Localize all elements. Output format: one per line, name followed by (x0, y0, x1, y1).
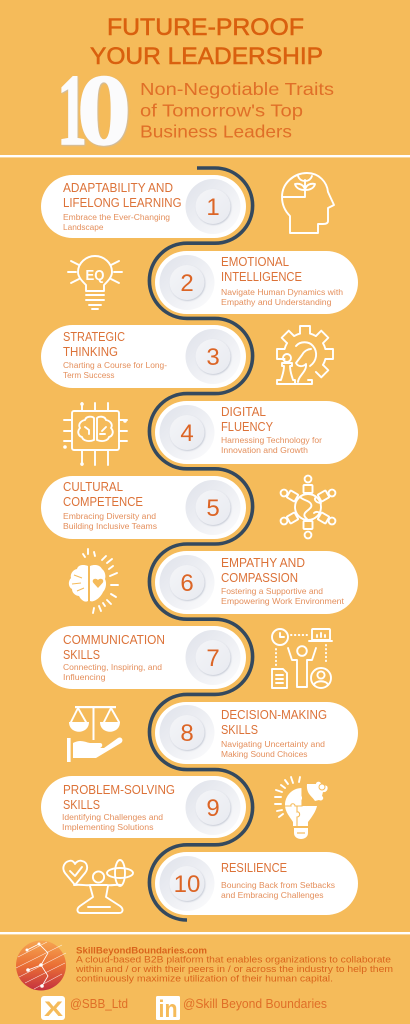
trait 4: 4 (180, 420, 194, 447)
trait 2: 2 (180, 270, 194, 297)
icon: LinkedIn: in (158, 996, 178, 1023)
subtitle (140, 79, 334, 142)
trait 9: 9 (206, 795, 220, 822)
footer description: continuously maximize utilization of their human capital. (76, 973, 333, 984)
trait 2: Navigate Human Dynamics with (221, 287, 343, 297)
trait 8: 8 (180, 720, 194, 747)
trait 8: Navigating Uncertainty and (221, 739, 325, 749)
trait 2: INTELLIGENCE (221, 270, 302, 284)
serpentine connector (149, 168, 253, 920)
icon: head with plant (282, 173, 334, 233)
LinkedIn handle: @Skill Beyond Boundaries (183, 997, 327, 1011)
trait 9: Implementing Solutions (62, 822, 154, 832)
title: YOUR LEADERSHIP (90, 43, 323, 70)
icon: brain with heart (69, 549, 118, 613)
trait 5 (41, 476, 246, 539)
icon: EQ light bulb (68, 256, 122, 309)
trait 1: Embrace the Ever-Changing (63, 212, 170, 222)
trait 5: Embracing Diversity and (63, 511, 156, 521)
trait 9: PROBLEM-SOLVING (63, 783, 175, 797)
icon: gear with chess pieces (277, 326, 333, 384)
trait 10: and Embracing Challenges (221, 890, 324, 900)
trait 10 (155, 852, 358, 915)
icon: globe with people (281, 476, 335, 538)
subtitle: Non-Negotiable Traits (140, 79, 334, 99)
trait 1: 1 (206, 194, 220, 221)
trait 3: THINKING (63, 345, 118, 359)
trait 5: CULTURAL (63, 480, 123, 494)
trait 9 (41, 776, 246, 838)
trait 4: DIGITAL (221, 405, 266, 419)
trait 9: SKILLS (63, 798, 100, 812)
trait 10: RESILIENCE (221, 861, 287, 875)
trait 10: 10 (174, 871, 200, 898)
trait 6: 6 (180, 570, 194, 597)
icon: puzzle light bulb (275, 777, 328, 839)
trait 4 (155, 401, 358, 464)
trait 8: SKILLS (221, 723, 258, 737)
trait 4: FLUENCY (221, 420, 274, 434)
trait 7 (41, 626, 246, 689)
footer description: SkillBeyondBoundaries.com (76, 946, 207, 956)
trait 7: Connecting, Inspiring, and (63, 662, 162, 672)
trait 6: Fostering a Supportive and (221, 586, 323, 596)
subtitle: Business Leaders (140, 122, 292, 142)
trait 6: Empowering Work Environment (221, 596, 345, 606)
trait 2 (155, 251, 358, 314)
icon: X (41, 996, 65, 1021)
trait 7: Influencing (63, 672, 106, 682)
trait 3: Charting a Course for Long- (63, 360, 167, 370)
footer description: A cloud-based B2B platform that enables organizations to collaborate (76, 955, 391, 966)
trait 1: LIFELONG LEARNING (63, 196, 182, 210)
trait 9: Identifying Challenges and (62, 812, 163, 822)
icon: EQ light bulb: EQ (86, 267, 105, 284)
trait 2: Empathy and Understanding (221, 297, 332, 307)
icon: X: X (44, 998, 63, 1021)
title: FUTURE-PROOF (107, 14, 304, 41)
icon: hand holding scales (67, 706, 122, 762)
trait 6: EMPATHY AND (221, 556, 305, 570)
trait 7: COMMUNICATION (63, 633, 165, 647)
trait 6: COMPASSION (221, 571, 298, 585)
big number 10 (57, 54, 131, 167)
trait 5: Building Inclusive Teams (63, 521, 157, 531)
trait 8: DECISION-MAKING (221, 708, 327, 722)
trait 1: ADAPTABILITY AND (63, 181, 173, 195)
X handle: @SBB_Ltd (70, 997, 128, 1011)
footer description: within and / or with their peers in / or across the industry to help them (75, 964, 393, 975)
icon: brain chip (63, 402, 127, 466)
trait 4: Innovation and Growth (221, 445, 308, 455)
icon: balanced person with heart and atom (63, 860, 133, 913)
trait 7: 7 (206, 645, 220, 672)
footer description (75, 946, 393, 984)
big number 10: 1 (57, 54, 87, 167)
trait 6 (155, 551, 358, 614)
subtitle: of Tomorrow's Top (140, 100, 303, 120)
trait 1: Landscape (63, 222, 104, 232)
trait 3: STRATEGIC (63, 330, 125, 344)
icon: person with work tools (272, 629, 332, 688)
trait 7: SKILLS (63, 648, 100, 662)
trait 8 (155, 702, 358, 764)
trait 3: 3 (206, 344, 220, 371)
big number 10: 0 (77, 54, 131, 167)
title (90, 14, 323, 70)
trait 2: EMOTIONAL (221, 255, 289, 269)
footer logo (16, 940, 66, 990)
trait 10: Bouncing Back from Setbacks (221, 880, 335, 890)
trait 8: Making Sound Choices (221, 749, 308, 759)
trait 1 (41, 175, 246, 238)
trait 5: COMPETENCE (63, 495, 143, 509)
trait 3: Term Success (63, 370, 114, 380)
trait 4: Harnessing Technology for (221, 435, 322, 445)
trait 3 (41, 325, 246, 388)
trait 5: 5 (206, 495, 220, 522)
